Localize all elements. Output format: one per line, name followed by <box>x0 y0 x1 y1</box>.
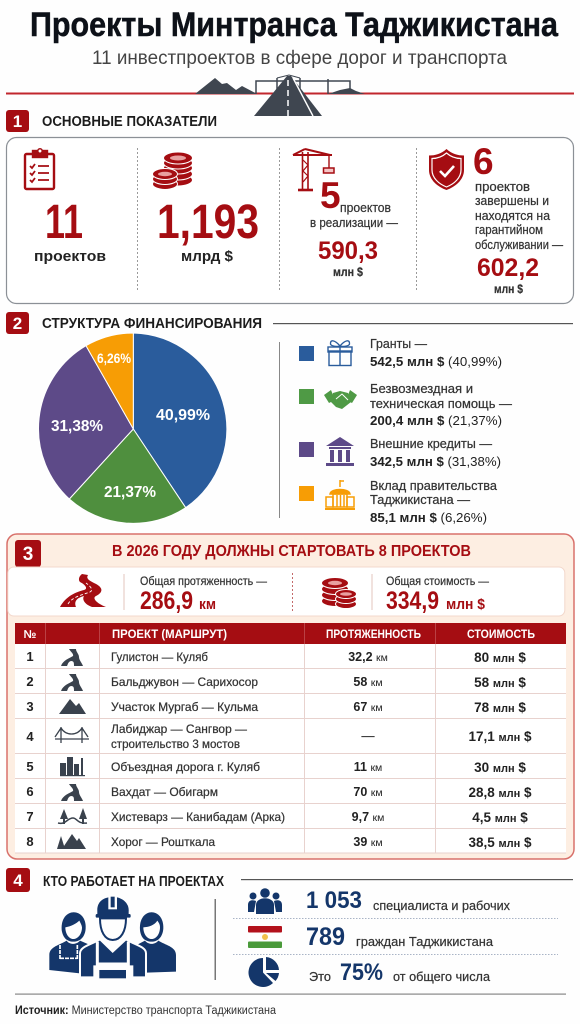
stat: citizens: граждан Таджикистана <box>356 935 493 949</box>
total length: Общая протяженность — <box>140 574 267 588</box>
legend: technical assistance: техническая помощь — <box>370 397 513 411</box>
row 5: Объездная дорога г. Куляб <box>111 760 260 774</box>
row 6: 28,8 млн $ <box>468 785 532 800</box>
icon: people <box>248 888 282 914</box>
stat: share: Это <box>309 970 331 984</box>
section 3 badge: 3 <box>23 544 33 565</box>
row 1: 80 млн $ <box>474 650 526 665</box>
row 5: 11 км <box>354 760 382 774</box>
table header <box>24 627 535 641</box>
legend: technical assistance <box>299 382 513 428</box>
row 1: 32,2 км <box>348 650 388 664</box>
total length: 286,9 <box>140 587 193 615</box>
legend: government contribution <box>299 479 497 525</box>
stat: 5 in progress: проектов <box>340 201 391 215</box>
row 7: 4,5 млн $ <box>472 810 528 825</box>
section 2 badge <box>6 312 29 334</box>
section 2 badge: 2 <box>13 314 22 333</box>
section 3 badge <box>15 540 41 567</box>
row 3: 67 км <box>353 700 383 714</box>
subtitle: 11 инвестпроектов в сфере дорог и транспорта <box>92 47 507 69</box>
stat: 11 projects: проектов <box>34 248 106 265</box>
legend: technical assistance: 200,4 млн $ (21,37%) <box>370 413 502 428</box>
legend: external loans: Внешние кредиты — <box>370 437 492 451</box>
total cost: млн $ <box>446 597 485 613</box>
total length <box>140 574 267 615</box>
panel: key indicators <box>6 138 574 304</box>
icon: government building <box>325 480 355 509</box>
section 2 heading: СТРУКТУРА ФИНАНСИРОВАНИЯ <box>42 316 262 332</box>
row 3: 78 млн $ <box>474 700 526 715</box>
row 2: Бальджувон — Сарихосор <box>111 675 258 689</box>
stat: 6 completed: завершены и <box>475 194 549 208</box>
icon: workers <box>49 896 176 978</box>
legend: technical assistance: Безвозмездная и <box>370 382 473 396</box>
stat: 6 completed: млн $ <box>494 284 524 296</box>
row 3: Участок Мургаб — Кульма <box>111 700 258 714</box>
row 6 <box>26 784 532 801</box>
row 2: 58 млн $ <box>474 675 526 690</box>
stat: 5 in progress: млн $ <box>333 267 364 279</box>
row 2: 2 <box>26 674 34 689</box>
total cost: Общая стоимость — <box>386 574 489 588</box>
row 1: 1 <box>26 649 34 664</box>
stat: 6 completed: находятся на <box>475 209 550 223</box>
stat: 6 completed: проектов <box>475 180 530 194</box>
stat: citizens <box>306 923 493 951</box>
stat: 5 in progress <box>310 175 398 279</box>
row 7: 7 <box>26 809 34 824</box>
stat: 6 completed: обслуживании — <box>475 238 563 252</box>
row 7: 9,7 км <box>352 810 384 824</box>
legend: external loans <box>299 437 501 469</box>
icon: shield <box>429 149 464 190</box>
stat: 1,193 billion: млрд $ <box>181 248 234 265</box>
stat: citizens: 789 <box>306 923 345 951</box>
row 8 <box>26 834 532 850</box>
row 6: 6 <box>26 784 34 799</box>
legend: government contribution: 85,1 млн $ (6,26%) <box>370 510 487 525</box>
row 5: 30 млн $ <box>474 760 526 775</box>
section 1 badge <box>6 110 29 132</box>
row 4 <box>26 722 532 751</box>
stat: 1,193 billion <box>157 196 259 265</box>
row 4: строительство 3 мостов <box>111 737 240 751</box>
legend: government contribution: Таджикистана — <box>370 493 471 507</box>
icon: gift <box>328 341 352 366</box>
total cost <box>386 574 489 615</box>
icon: bank <box>326 437 354 466</box>
pie chart: financing structure <box>39 333 227 523</box>
panel: section 3 projects starting in 2026 <box>7 534 574 859</box>
table header: СТОИМОСТЬ <box>467 627 535 641</box>
stat: share: от общего числа <box>393 970 490 984</box>
icon: clipboard <box>25 149 54 189</box>
row 3 <box>26 699 526 715</box>
row 1 <box>26 649 526 666</box>
row 6: Вахдат — Обигарм <box>111 785 218 799</box>
stat: share <box>309 959 490 986</box>
pie chart: financing structure: 21,37% <box>104 484 156 501</box>
stat: 6 completed: 602,2 <box>477 254 539 282</box>
legend: grants: Гранты — <box>370 337 427 351</box>
section 4 heading: КТО РАБОТАЕТ НА ПРОЕКТАХ <box>43 874 224 890</box>
row 4: 4 <box>26 729 34 744</box>
stat: specialists: специалиста и рабочих <box>373 899 511 913</box>
summary strip <box>8 567 565 616</box>
icon: flag of Tajikistan <box>248 926 282 948</box>
row 2: 58 км <box>353 675 383 689</box>
header divider with road illustration <box>6 75 574 116</box>
pie chart: financing structure: 31,38% <box>51 418 103 435</box>
stat: 6 completed: гарантийном <box>475 223 543 237</box>
stat: 11 projects: 11 <box>45 196 83 249</box>
icon: crane <box>293 149 334 190</box>
pie chart: financing structure: 40,99% <box>156 407 210 424</box>
row 8: 8 <box>26 834 34 849</box>
legend: government contribution: Вклад правительства <box>370 479 497 493</box>
row 4: 17,1 млн $ <box>468 729 532 744</box>
legend: grants <box>299 337 502 369</box>
section 1 badge: 1 <box>13 112 22 131</box>
section 4 badge <box>6 868 30 892</box>
total cost: 334,9 <box>386 587 439 615</box>
legend: grants: 542,5 млн $ (40,99%) <box>370 354 502 369</box>
pie chart: financing structure: 6,26% <box>97 351 131 366</box>
row 4: — <box>362 728 374 743</box>
row 7: Хистеварз — Канибадам (Арка) <box>111 810 285 824</box>
stat: 6 completed: 6 <box>473 141 494 182</box>
workers stats <box>233 887 558 987</box>
stat: 6 completed <box>473 141 563 296</box>
row 8: 38,5 млн $ <box>468 835 532 850</box>
icon: handshake <box>324 390 357 409</box>
icon: pie chart <box>249 957 279 987</box>
row 4: Лабиджар — Сангвор — <box>111 722 247 736</box>
stat: specialists <box>306 887 511 914</box>
row 7 <box>26 808 528 825</box>
table header: ПРОТЯЖЕННОСТЬ <box>326 627 421 641</box>
table header: № <box>24 629 37 641</box>
stat: share: 75% <box>340 959 383 986</box>
stat: 5 in progress: в реализации — <box>310 216 398 230</box>
icon: coins <box>152 152 192 190</box>
section 4 badge: 4 <box>13 871 23 890</box>
section 3 heading: В 2026 ГОДУ ДОЛЖНЫ СТАРТОВАТЬ 8 ПРОЕКТОВ <box>112 543 471 560</box>
row 1: Гулистон — Куляб <box>111 650 208 664</box>
stat: 1,193 billion: 1,193 <box>157 196 259 249</box>
stat: specialists: 1 053 <box>306 887 362 914</box>
stat: 11 projects <box>34 196 106 265</box>
table: projects <box>15 623 566 853</box>
row 2 <box>26 674 526 691</box>
row 5 <box>26 757 526 776</box>
stat: 5 in progress: 590,3 <box>318 237 378 265</box>
row 6: 70 км <box>353 785 383 799</box>
table header: ПРОЕКТ (МАРШРУТ) <box>112 627 227 641</box>
source: Источник: Министерство транспорта Таджикистана <box>15 1005 277 1017</box>
section 1 heading: ОСНОВНЫЕ ПОКАЗАТЕЛИ <box>42 114 217 130</box>
row 8: Хорог — Рошткала <box>111 835 215 849</box>
row 3: 3 <box>26 699 34 714</box>
legend: external loans: 342,5 млн $ (31,38%) <box>370 454 501 469</box>
total length: км <box>199 597 216 613</box>
row 8: 39 км <box>353 835 383 849</box>
stat: 5 in progress: 5 <box>320 175 341 216</box>
icon: coins <box>322 578 356 608</box>
icon: winding road <box>60 574 106 607</box>
row 5: 5 <box>26 759 34 774</box>
